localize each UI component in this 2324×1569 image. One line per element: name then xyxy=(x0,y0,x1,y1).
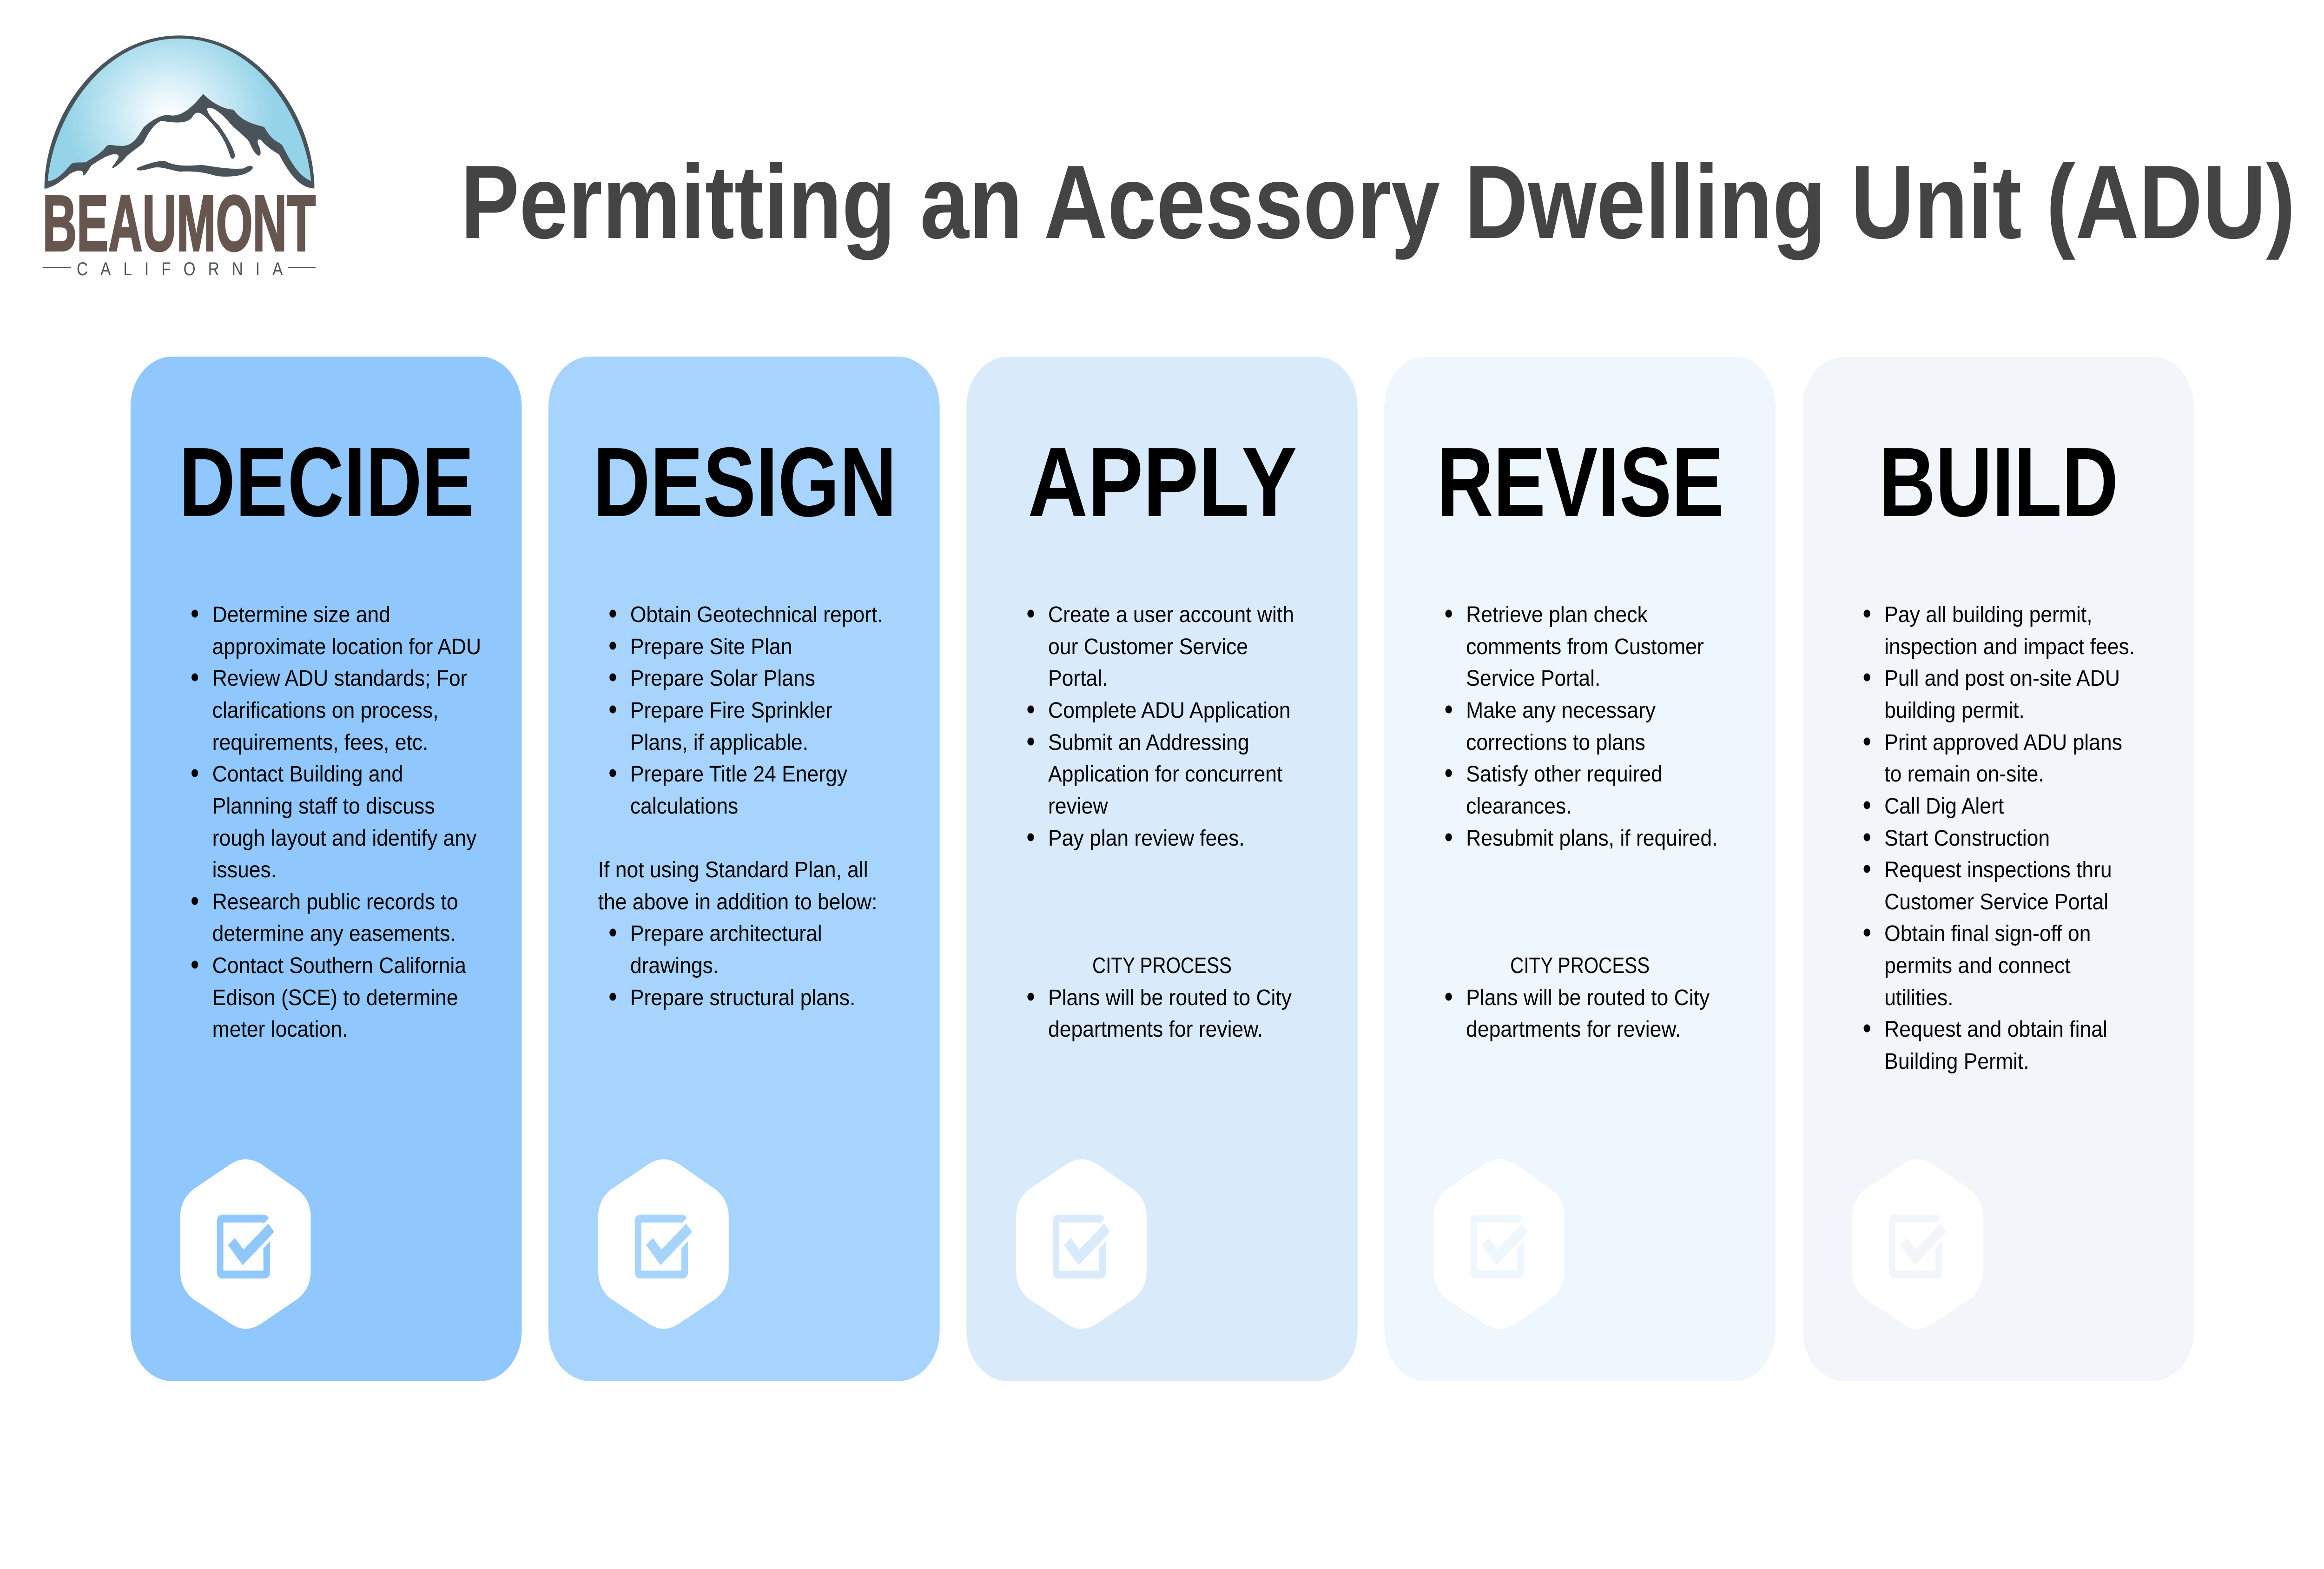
bullet list: Pay all building permit, xyxy=(1884,602,2093,627)
bullet list: approximate location for ADU xyxy=(212,634,481,659)
bullet list: Customer Service Portal xyxy=(1884,889,2108,914)
bullet list: Application for concurrent xyxy=(1048,761,1282,786)
bullet list xyxy=(1446,602,1718,1041)
bullet list: building permit. xyxy=(1884,697,2025,722)
sub-heading: city process: CITY PROCESS xyxy=(1510,953,1650,978)
bullet list: Plans will be routed to City xyxy=(1048,985,1292,1010)
bullet list: If not using Standard Plan, all xyxy=(598,857,868,882)
bullet list: drawings. xyxy=(630,953,719,978)
bullet list: Planning staff to discuss xyxy=(212,793,435,818)
bullet list: Pay plan review fees. xyxy=(1048,825,1245,850)
heading: REVISE xyxy=(1437,427,1724,537)
panel: build xyxy=(1802,357,2194,1381)
bullet list: Service Portal. xyxy=(1466,665,1600,690)
bullet list: inspection and impact fees. xyxy=(1884,634,2135,659)
bullet list: Edison (SCE) to determine xyxy=(212,985,458,1010)
bullet list: Call Dig Alert xyxy=(1884,793,2004,818)
icon: checkbox in hexagon xyxy=(180,1159,311,1329)
icon: checkbox in hexagon xyxy=(1434,1159,1565,1329)
logo: Beaumont California xyxy=(43,35,316,279)
heading: DESIGN xyxy=(593,427,897,537)
icon: checkbox in hexagon xyxy=(1016,1159,1147,1329)
bullet list: Prepare Site Plan xyxy=(630,634,792,659)
bullet list: utilities. xyxy=(1884,985,1953,1010)
bullet list: Prepare Solar Plans xyxy=(630,665,815,690)
bullet list: Pull and post on-site ADU xyxy=(1884,665,2120,690)
bullet list: departments for review. xyxy=(1048,1016,1263,1041)
bullet list: Resubmit plans, if required. xyxy=(1466,825,1718,850)
panel: apply xyxy=(966,357,1358,1381)
icon: checkbox in hexagon xyxy=(598,1159,729,1329)
card background xyxy=(1802,357,2194,1381)
logo sub-wordmark CALIFORNIA: CALIFORNIA xyxy=(77,258,283,279)
card background xyxy=(966,357,1358,1381)
bullet list: Request and obtain final xyxy=(1884,1016,2107,1041)
panel: design xyxy=(548,357,940,1381)
bullet list xyxy=(191,602,481,1041)
heading: BUILD xyxy=(1879,427,2119,537)
bullet list: Contact Southern California xyxy=(212,953,466,978)
panel: revise xyxy=(1384,357,1776,1381)
card background xyxy=(131,357,522,1381)
bullet list: review xyxy=(1048,793,1108,818)
bullet list: corrections to plans xyxy=(1466,729,1645,755)
bullet list: clearances. xyxy=(1466,793,1572,818)
logo rule right xyxy=(288,267,316,268)
bullet list: Contact Building and xyxy=(212,761,403,786)
panel: decide xyxy=(131,357,522,1381)
bullet list: Obtain Geotechnical report. xyxy=(630,602,883,627)
bullet list xyxy=(598,602,883,1010)
bullet list: Complete ADU Application xyxy=(1048,697,1291,722)
bullet list: Determine size and xyxy=(212,602,390,627)
bullet list: Print approved ADU plans xyxy=(1884,729,2122,755)
bullet list: permits and connect xyxy=(1884,953,2071,978)
bullet list: determine any easements. xyxy=(212,920,456,946)
bullet list: issues. xyxy=(212,857,277,882)
bullet list: Create a user account with xyxy=(1048,602,1294,627)
bullet list: Prepare architectural xyxy=(630,920,822,946)
bullet list: Plans will be routed to City xyxy=(1466,985,1710,1010)
heading: APPLY xyxy=(1028,427,1297,537)
bullet list: Prepare Title 24 Energy xyxy=(630,761,848,786)
bullet list: Review ADU standards; For xyxy=(212,665,467,690)
bullet list: Obtain final sign-off on xyxy=(1884,920,2091,946)
sub-heading: city process: CITY PROCESS xyxy=(1092,953,1232,978)
bullet list: our Customer Service xyxy=(1048,634,1248,659)
bullet list: clarifications on process, xyxy=(212,697,439,722)
bullet list: to remain on-site. xyxy=(1884,761,2044,786)
bullet list: meter location. xyxy=(212,1016,348,1041)
card background xyxy=(1384,357,1776,1381)
bullet list: Prepare Fire Sprinkler xyxy=(630,697,832,722)
bullet list: Portal. xyxy=(1048,665,1108,690)
bullet list: Submit an Addressing xyxy=(1048,729,1249,755)
bullet list xyxy=(1864,602,2135,1073)
logo rule left xyxy=(43,267,71,268)
bullet list: Satisfy other required xyxy=(1466,761,1663,786)
bullet list: comments from Customer xyxy=(1466,634,1704,659)
bullet list: requirements, fees, etc. xyxy=(212,729,428,755)
bullet list: Research public records to xyxy=(212,889,458,914)
title: Permitting an Acessory Dwelling Unit (ADU) xyxy=(461,144,2295,260)
bullet list: Make any necessary xyxy=(1466,697,1656,722)
bullet list: Start Construction xyxy=(1884,825,2050,850)
bullet list: calculations xyxy=(630,793,738,818)
bullet list: Prepare structural plans. xyxy=(630,985,855,1010)
heading: DECIDE xyxy=(179,427,474,537)
card background xyxy=(548,357,940,1381)
logo wordmark BEAUMONT: BEAUMONT xyxy=(43,179,316,268)
bullet list: the above in addition to below: xyxy=(598,889,877,914)
icon: checkbox in hexagon xyxy=(1852,1159,1983,1329)
bullet list: departments for review. xyxy=(1466,1016,1681,1041)
bullet list: rough layout and identify any xyxy=(212,825,477,850)
bullet list: Plans, if applicable. xyxy=(630,729,808,755)
bullet list: Building Permit. xyxy=(1884,1048,2029,1073)
bullet list: Retrieve plan check xyxy=(1466,602,1648,627)
bullet list xyxy=(1027,602,1294,1041)
logo mountain dome xyxy=(44,35,314,188)
bullet list: Request inspections thru xyxy=(1884,857,2112,882)
